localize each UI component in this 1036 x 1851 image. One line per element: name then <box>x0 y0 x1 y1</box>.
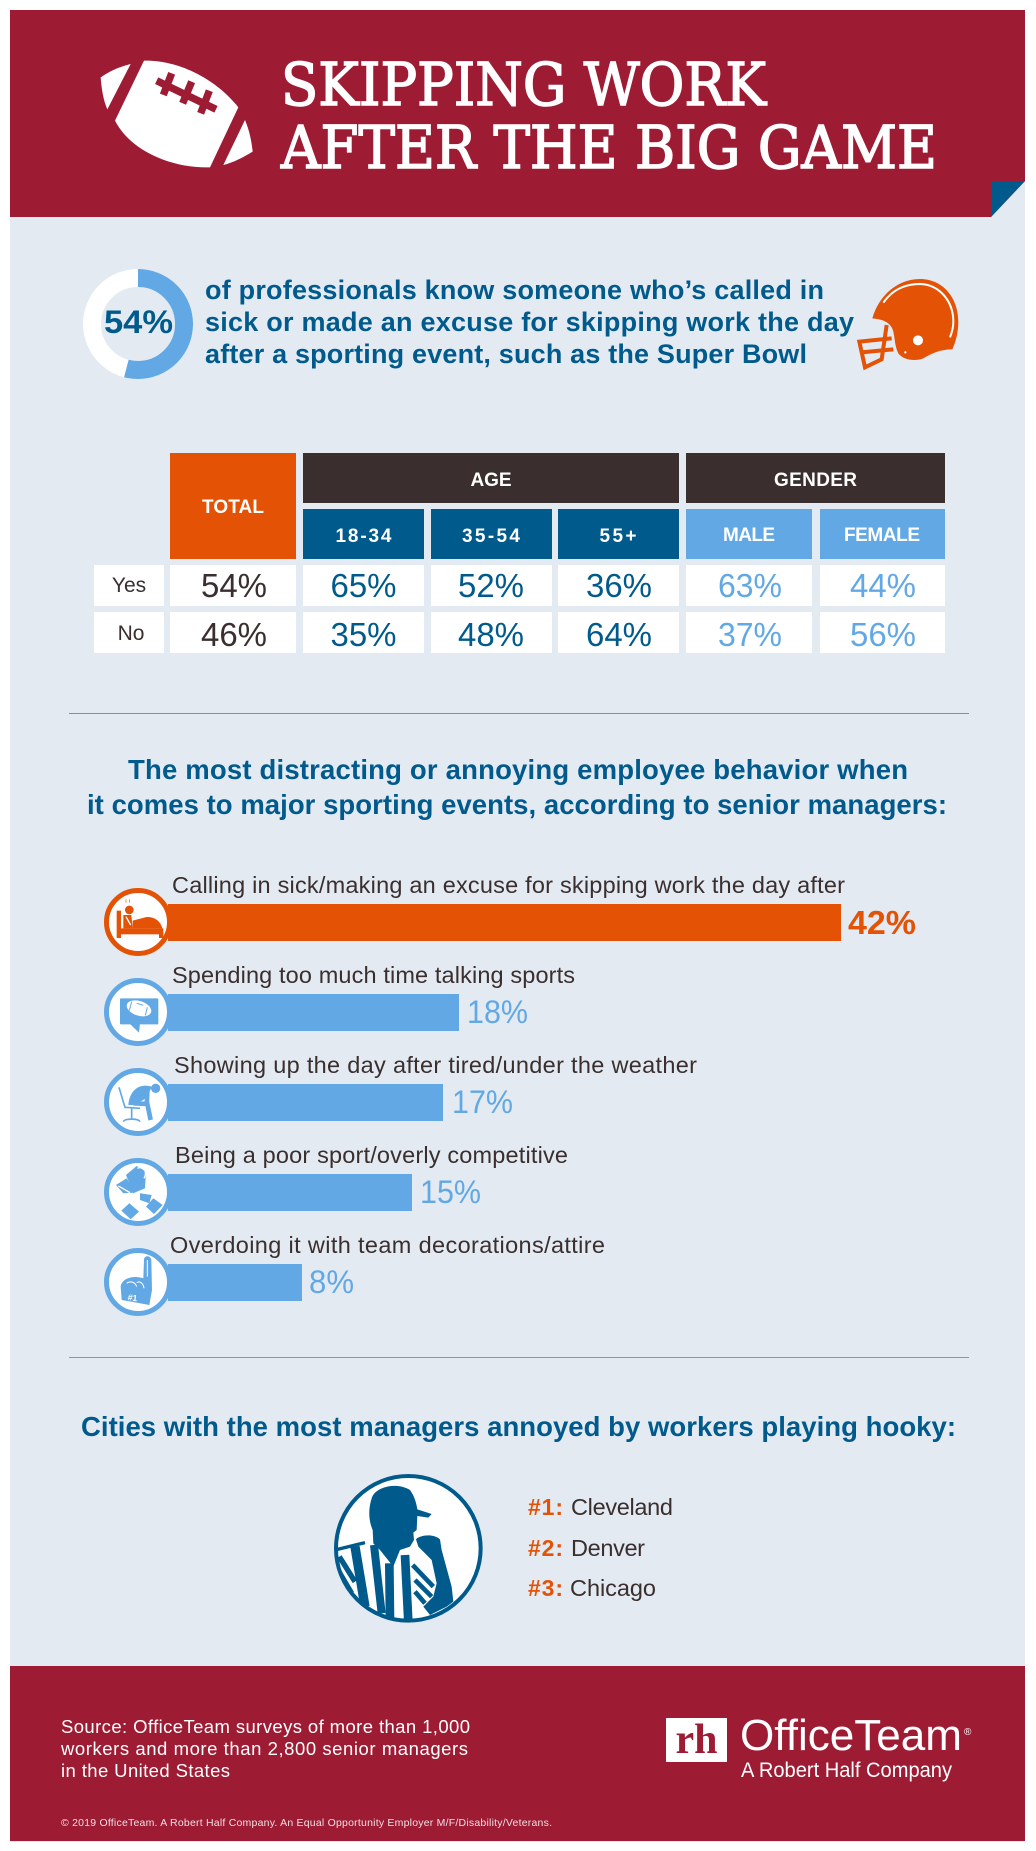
header: female: FEMALE <box>844 525 920 546</box>
row: yes: 54% <box>201 567 267 604</box>
header: total <box>170 453 296 559</box>
row: yes: 63% <box>718 567 782 604</box>
row: no: No <box>118 622 144 645</box>
row: yes: 65% <box>330 567 396 604</box>
heading: distracting behavior: The most distracting or annoying employee behavior when <box>128 754 908 785</box>
bar row: decorations 8% <box>106 1232 605 1314</box>
bar row: talking sports 18% <box>106 962 575 1044</box>
header: 35-54: 35-54 <box>462 526 520 547</box>
bar row: calling in sick 42%: Calling in sick/making an excuse for skipping work the day after <box>172 872 845 898</box>
title: SKIPPING WORK <box>281 50 767 119</box>
bar row: poor sport 15% <box>106 1142 568 1224</box>
copyright: © 2019 OfficeTeam. A Robert Half Company. An Equal Opportunity Employer M/F/Disability/Veterans. <box>61 1817 552 1829</box>
header: total: TOTAL <box>202 497 264 518</box>
banner shape <box>10 10 1025 217</box>
row: no: 37% <box>718 616 782 653</box>
row: no: 48% <box>458 616 524 653</box>
footer <box>10 1666 1025 1841</box>
header: age <box>303 453 679 503</box>
source note <box>60 1716 470 1781</box>
header: 18-34 <box>303 509 424 559</box>
bar row: calling in sick 42% <box>106 872 916 954</box>
row: yes: 52% <box>458 567 524 604</box>
row: yes: Yes <box>112 574 146 597</box>
icon: broken trophy <box>116 1166 163 1219</box>
donut chart: 54% <box>92 278 184 370</box>
header: 18-34: 18-34 <box>336 526 392 547</box>
city 3: #3: <box>528 1575 563 1601</box>
bar row: decorations 8%: 8% <box>309 1264 354 1300</box>
city 2 <box>528 1535 645 1561</box>
icon: tired person in chair <box>119 1084 160 1122</box>
city 3 <box>528 1575 656 1601</box>
row: yes: 36% <box>586 567 652 604</box>
icon: foam finger: #1 <box>127 1292 138 1303</box>
city 1: #1: <box>528 1494 563 1520</box>
header: male <box>686 509 812 559</box>
header: 55+: 55+ <box>600 526 636 547</box>
bar row: poor sport 15%: 15% <box>420 1174 481 1210</box>
intro text: sick or made an excuse for skipping work the day <box>205 307 854 337</box>
logo: OfficeTeam: OfficeTeam <box>740 1711 962 1760</box>
header: female <box>820 509 945 559</box>
bar row: calling in sick 42%: 42% <box>848 904 916 941</box>
bar chart: annoying behaviors <box>106 872 916 1314</box>
icon: speech bubble football <box>120 997 158 1033</box>
city 1: Cleveland <box>571 1494 673 1520</box>
source note: in the United States <box>61 1760 230 1781</box>
source note: Source: OfficeTeam surveys of more than 1,000 <box>61 1716 470 1737</box>
bar row: decorations 8%: Overdoing it with team decorations/attire <box>170 1232 605 1258</box>
icon: foam finger <box>121 1256 152 1305</box>
logo: OfficeTeam: A Robert Half Company <box>741 1759 952 1782</box>
icon: referee <box>335 1476 481 1622</box>
bar row: poor sport 15%: Being a poor sport/overly competitive <box>175 1142 568 1168</box>
row: no: 35% <box>330 616 396 653</box>
row: no: 64% <box>586 616 652 653</box>
header: gender: GENDER <box>774 470 857 491</box>
header: gender <box>686 453 945 503</box>
logo: OfficeTeam <box>666 1711 972 1782</box>
icon: football <box>101 61 253 167</box>
source note: workers and more than 2,800 senior managers <box>60 1738 468 1759</box>
row: no <box>94 612 945 653</box>
title <box>280 50 937 182</box>
city 2: #2: <box>528 1535 563 1561</box>
header: 55+ <box>558 509 679 559</box>
intro text: of professionals know someone who’s called in <box>205 275 824 305</box>
banner fold <box>991 181 1025 217</box>
city 3: Chicago <box>570 1575 656 1601</box>
data table <box>94 453 945 653</box>
bar row: talking sports 18%: 18% <box>467 994 528 1030</box>
row: yes: 44% <box>850 567 916 604</box>
logo: OfficeTeam: ® <box>964 1727 972 1738</box>
heading: cities: Cities with the most managers annoyed by workers playing hooky: <box>81 1411 956 1442</box>
header: age: AGE <box>470 470 512 491</box>
header: 35-54 <box>431 509 552 559</box>
city 2: Denver <box>571 1535 645 1561</box>
icon: helmet <box>859 279 958 367</box>
bar row: tired 17% <box>106 1052 697 1134</box>
row: yes <box>94 565 945 606</box>
heading: distracting behavior: it comes to major sporting events, according to senior managers: <box>87 789 947 820</box>
logo: OfficeTeam: rh <box>676 1717 718 1763</box>
intro text: after a sporting event, such as the Super Bowl <box>205 339 807 369</box>
icon: person in bed <box>117 899 163 938</box>
row: no: 56% <box>850 616 916 653</box>
row: no: 46% <box>201 616 267 653</box>
heading: distracting behavior <box>87 754 947 820</box>
bar row: tired 17%: Showing up the day after tired/under the weather <box>174 1052 697 1078</box>
header banner <box>10 10 1025 217</box>
donut chart: 54%: 54% <box>104 304 173 340</box>
cities list <box>528 1494 673 1601</box>
intro text <box>205 275 854 369</box>
title: AFTER THE BIG GAME <box>280 113 937 182</box>
bar row: talking sports 18%: Spending too much time talking sports <box>172 962 575 988</box>
bar row: tired 17%: 17% <box>452 1084 513 1120</box>
header: male: MALE <box>723 525 775 546</box>
